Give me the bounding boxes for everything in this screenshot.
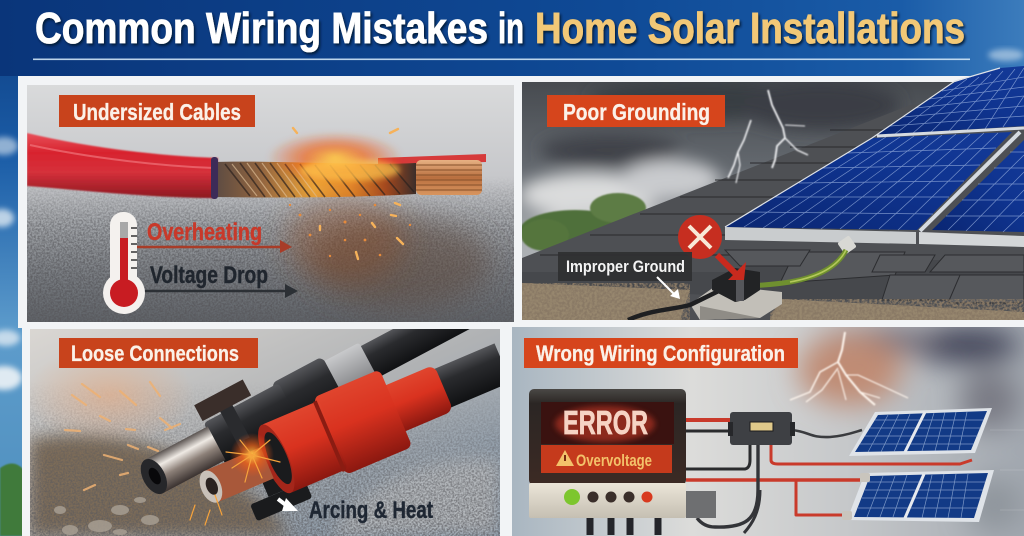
solar panel top xyxy=(849,408,992,456)
status LEDs xyxy=(564,489,652,505)
callout: arcing and heat: Arcing & Heat xyxy=(309,497,433,524)
error text: ERROR xyxy=(563,404,648,441)
label: poor grounding xyxy=(547,95,725,127)
label: undersized cables: Undersized Cables xyxy=(73,99,241,125)
inverter box xyxy=(529,389,716,535)
overheating label and arrow: Overheating xyxy=(147,219,262,246)
title text xyxy=(35,4,965,53)
panel: undersized cables xyxy=(27,85,514,325)
solar panel bottom xyxy=(842,470,994,522)
title text: in xyxy=(498,4,524,53)
panel: poor grounding xyxy=(520,66,1024,320)
fire and sparks xyxy=(267,128,411,282)
wiring xyxy=(659,420,972,533)
grounding hardware xyxy=(628,250,846,320)
solar array xyxy=(725,66,1024,255)
sparks xyxy=(65,382,280,525)
icon: red cable with exposed strands xyxy=(27,133,486,199)
overvoltage warning: Overvoltage xyxy=(576,451,652,470)
label: wrong wiring configuration: Wrong Wiring Configuration xyxy=(536,341,785,366)
title text: Common Wiring Mistakes xyxy=(35,4,488,53)
arrow: red pointer xyxy=(717,255,746,280)
label: poor grounding: Poor Grounding xyxy=(563,99,710,125)
junction box xyxy=(728,412,795,445)
roof with shingles xyxy=(522,100,1024,320)
title banner xyxy=(0,0,1024,76)
callout: improper ground: Improper Ground xyxy=(566,257,685,276)
label: loose connections: Loose Connections xyxy=(71,341,239,366)
panel: wrong wiring configuration xyxy=(512,327,1024,536)
callout: arcing and heat xyxy=(278,497,433,524)
label: undersized cables xyxy=(59,95,255,127)
voltage drop label and arrow: Voltage Drop xyxy=(150,262,268,289)
icon: red X xyxy=(678,215,722,259)
icon: red lower connector xyxy=(200,344,500,520)
panel: loose connections xyxy=(30,329,500,536)
trees xyxy=(520,193,646,251)
callout: improper ground xyxy=(558,252,692,299)
overvoltage warning xyxy=(541,445,672,473)
lightning bolt xyxy=(790,332,908,405)
icon: black upper connector xyxy=(140,329,470,494)
gravel xyxy=(522,283,1024,320)
icon: thermometer xyxy=(103,212,145,314)
lightning xyxy=(728,90,808,183)
